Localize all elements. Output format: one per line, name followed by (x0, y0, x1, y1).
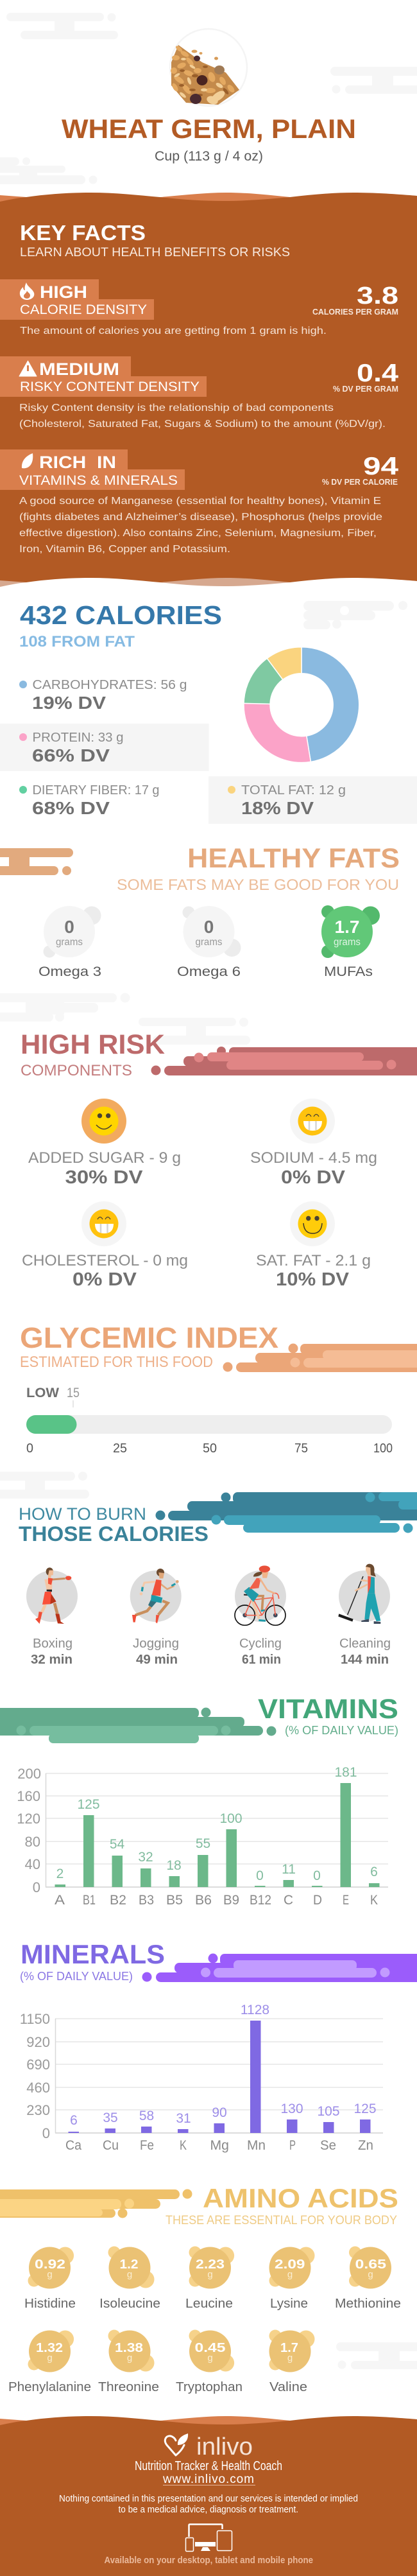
panel: vitamins (0, 1694, 398, 1908)
fact: rich in vitamins and minerals: Iron, Vitamin B6, Copper and Potassium. (19, 544, 230, 555)
amino: phenylalanine: 1.32 (36, 2341, 63, 2355)
bar chart: vitamins: B9 (223, 1893, 239, 1908)
title: WHEAT GERM, PLAIN (62, 114, 356, 144)
panel: calories (0, 600, 417, 824)
stat: dietary fiber (19, 783, 159, 818)
disclaimer: Nothing contained in this presentation and our services is intended or implied (59, 2493, 358, 2504)
amino: methionine: g (368, 2269, 373, 2280)
stat: protein (0, 724, 209, 771)
heading: 432 calories: 432 CALORIES (20, 600, 222, 630)
gauge bar (26, 1386, 393, 1456)
amino: phenylalanine: Phenylalanine (8, 2380, 91, 2394)
heading: how to burn those calories: THOSE CALORIES (19, 1522, 208, 1545)
icon: person sweeping (338, 1564, 380, 1624)
amino: lysine (269, 2247, 314, 2311)
amino: histidine (24, 2247, 76, 2311)
stat: dietary fiber: DIETARY FIBER: 17 g (32, 783, 159, 797)
availability note: Available on your desktop, tablet and mobile phone (104, 2555, 313, 2566)
bar chart: vitamins: 181 (334, 1765, 357, 1780)
subheading: key facts: LEARN ABOUT HEALTH BENEFITS OR RISKS (20, 246, 290, 259)
bar chart: minerals: 35 (103, 2110, 118, 2125)
bar chart: vitamins: 18 (166, 1858, 182, 1873)
panel: key facts (0, 193, 417, 594)
bar chart: vitamins: 0 (33, 1879, 40, 1895)
amino: phenylalanine (8, 2331, 91, 2394)
amino: isoleucine (99, 2246, 160, 2311)
bar chart: vitamins: 120 (17, 1811, 40, 1827)
stat: added sugar: 30% DV (65, 1167, 143, 1188)
subheading: 108 from fat: 108 FROM FAT (19, 633, 135, 650)
amino: valine: g (287, 2353, 293, 2363)
disclaimer: to be a medical advice, diagnosis or treatment. (118, 2504, 298, 2515)
bar chart: minerals: 1128 (241, 2003, 269, 2017)
panel: minerals (20, 1939, 417, 2153)
gauge bar: 15 (67, 1386, 80, 1400)
fact: rich in vitamins and minerals: RICH IN (39, 453, 116, 472)
amino: methionine: Methionine (335, 2297, 401, 2311)
logo: inlivo: inlivo (196, 2433, 253, 2460)
subheading: ESTIMATED FOR THIS FOOD (20, 1353, 213, 1371)
stat: carbohydrates: CARBOHYDRATES: 56 g (32, 678, 187, 692)
bar chart: vitamins: 100 (219, 1811, 243, 1826)
stat: dietary fiber: 68% DV (32, 798, 110, 818)
stat: saturated fat: SAT. FAT - 2.1 g (256, 1252, 371, 1269)
amino: histidine: Histidine (24, 2297, 76, 2311)
fact: medium risky content density: 0.4 (357, 360, 398, 387)
fact: rich in vitamins and minerals (0, 449, 398, 555)
bar chart: vitamins: 125 (77, 1797, 100, 1812)
bar chart: minerals: K (180, 2138, 187, 2153)
heading: amino acids: AMINO ACIDS (203, 2183, 398, 2213)
stat: omega 3: 0 (64, 917, 74, 937)
gauge bar: LOW (26, 1386, 59, 1400)
bar chart: vitamins: 6 (370, 1865, 378, 1879)
fact: rich in vitamins and minerals: A good source of Manganese (essential for healthy bones), Vitamin E (19, 496, 381, 507)
bar chart: minerals: 105 (317, 2104, 340, 2119)
bar chart: vitamins: C (284, 1893, 293, 1908)
panel: healthy fats (0, 843, 400, 979)
stat: saturated fat: 10% DV (276, 1269, 350, 1290)
bar chart: vitamins: A (55, 1893, 65, 1908)
bar chart: minerals: Cu (103, 2138, 119, 2153)
website link: www.inlivo.com (162, 2473, 254, 2486)
stat: omega 6: grams (195, 937, 223, 948)
subheading: SOME FATS MAY BE GOOD FOR YOU (117, 876, 399, 894)
amino: threonine: 1.38 (115, 2341, 143, 2355)
heading: high risk: HIGH RISK (21, 1029, 165, 1060)
disclaimer (59, 2493, 358, 2515)
gauge bar: 100 (373, 1441, 393, 1456)
bar chart: vitamins: E (343, 1893, 349, 1908)
bar chart: vitamins: B3 (139, 1893, 154, 1908)
bar chart: vitamins: 55 (196, 1836, 210, 1851)
bar chart: vitamins: 54 (110, 1837, 124, 1852)
fact: medium risky content density (0, 356, 398, 430)
bar chart: minerals: 230 (26, 2102, 50, 2118)
stat: mufas: 1.7 (335, 917, 359, 937)
bar chart: minerals: 125 (353, 2102, 377, 2116)
bar chart: vitamins: 200 (17, 1766, 41, 1782)
bar chart: vitamins: 11 (282, 1862, 296, 1877)
amino: threonine: Threonine (98, 2380, 159, 2394)
amino: valine: 1.7 (280, 2341, 298, 2355)
amino: lysine: g (287, 2269, 293, 2280)
bar chart: minerals: Zn (358, 2138, 373, 2153)
bar chart: minerals: 0 (42, 2125, 50, 2141)
serving size: Cup (113 g / 4 oz) (155, 149, 263, 164)
bar chart: vitamins: 0 (313, 1868, 321, 1883)
bar chart: vitamins: K (370, 1893, 378, 1908)
amino: lysine: Lysine (270, 2297, 308, 2311)
fact: rich in vitamins and minerals: 94 (363, 453, 398, 480)
stat: mufas (321, 905, 380, 979)
icon: runner (132, 1569, 179, 1623)
stat: cholesterol: CHOLESTEROL - 0 mg (22, 1252, 188, 1269)
amino: isoleucine: g (127, 2269, 132, 2280)
stat: omega 6: 0 (204, 917, 214, 937)
activity: boxing: Boxing (33, 1636, 72, 1651)
amino: tryptophan: Tryptophan (176, 2380, 243, 2394)
amino: valine (269, 2329, 314, 2394)
panel: amino acids (0, 2183, 401, 2394)
activity: cycling (235, 1565, 286, 1667)
bar chart: vitamins: 40 (25, 1856, 40, 1872)
icon: leaf (22, 453, 33, 468)
fact: rich in vitamins and minerals: % DV PER CALORIE (322, 478, 398, 487)
stat: omega 6: Omega 6 (177, 964, 241, 979)
stat: added sugar: ADDED SUGAR - 9 g (28, 1149, 181, 1167)
stat: carbohydrates (19, 678, 187, 713)
amino: tryptophan: 0.45 (195, 2341, 226, 2355)
stat: carbohydrates: 19% DV (32, 693, 106, 713)
bar chart: minerals: 690 (26, 2057, 50, 2073)
fact: medium risky content density: RISKY CONTENT DENSITY (20, 379, 200, 394)
fact: high calorie density: CALORIES PER GRAM (312, 308, 398, 317)
activity: boxing (26, 1567, 78, 1667)
bar chart: vitamins: D (313, 1893, 322, 1908)
stat: omega 3: grams (56, 937, 83, 948)
bar chart: vitamins (17, 1765, 388, 1908)
bar chart: minerals: Mg (210, 2138, 229, 2153)
bar chart: vitamins: 160 (17, 1788, 40, 1804)
amino: histidine: g (47, 2269, 53, 2280)
bar chart: minerals: 130 (280, 2102, 303, 2116)
fact: rich in vitamins and minerals: effective digestion). Also contains Zinc, Selenium, Magnesium, Fiber, (19, 528, 377, 539)
bar chart: minerals: Se (320, 2138, 336, 2153)
heading: key facts: KEY FACTS (20, 221, 146, 245)
activity: cleaning (338, 1564, 391, 1667)
stat: protein: PROTEIN: 33 g (32, 731, 123, 745)
activity: cycling: 61 min (242, 1653, 281, 1667)
subheading: THESE ARE ESSENTIAL FOR YOUR BODY (166, 2213, 397, 2227)
bar chart: vitamins: 2 (56, 1867, 64, 1881)
stat: mufas: MUFAs (324, 964, 373, 979)
fact: high calorie density (0, 279, 398, 336)
amino: threonine (98, 2329, 159, 2394)
amino: phenylalanine: g (47, 2353, 53, 2363)
bar chart: minerals: 460 (26, 2080, 50, 2096)
amino: isoleucine: 1.2 (119, 2258, 139, 2272)
stat: added sugar (28, 1099, 181, 1188)
stat: omega 3: Omega 3 (38, 964, 101, 979)
panel: glycemic index (20, 1321, 417, 1456)
logo: inlivo (165, 2433, 253, 2460)
fact: high calorie density: CALORIE DENSITY (20, 302, 147, 317)
fact: rich in vitamins and minerals: VITAMINS & MINERALS (19, 473, 178, 488)
bar chart: minerals: 31 (176, 2111, 191, 2126)
activity: cleaning: 144 min (341, 1653, 389, 1667)
heading: how to burn those calories: HOW TO BURN (19, 1504, 146, 1524)
fact: medium risky content density: (Cholesterol, Saturated Fat, Sugars & Sodium) to the amount (%DV/gr). (19, 419, 386, 430)
stat: protein: 66% DV (32, 745, 110, 765)
fact: high calorie density: 3.8 (357, 283, 398, 309)
panel: high risk components (21, 1029, 417, 1290)
subheading: (% OF DAILY VALUE) (20, 1970, 133, 1983)
heading: vitamins: VITAMINS (258, 1694, 398, 1725)
bar chart: vitamins: 0 (256, 1868, 264, 1883)
amino: threonine: g (127, 2353, 132, 2363)
activity: cleaning: Cleaning (339, 1636, 391, 1651)
activity: jogging: 49 min (136, 1653, 178, 1667)
bar chart: vitamins: B2 (110, 1893, 126, 1908)
bar chart: vitamins: B5 (166, 1893, 183, 1908)
stat: total fat: TOTAL FAT: 12 g (241, 783, 346, 797)
amino: leucine (185, 2246, 234, 2311)
heading: glycemic index: GLYCEMIC INDEX (20, 1321, 278, 1354)
stat: sodium: SODIUM - 4.5 mg (250, 1149, 377, 1167)
gauge bar: 0 (26, 1441, 33, 1456)
stat: omega 6 (177, 906, 241, 979)
stat: omega 3 (38, 906, 101, 979)
icon: boxer (35, 1567, 71, 1624)
panel: footer (0, 2416, 417, 2576)
stat: total fat: 18% DV (241, 798, 314, 818)
amino: histidine: 0.92 (35, 2258, 65, 2272)
amino: isoleucine: Isoleucine (99, 2297, 160, 2311)
food photo: granola in circle (170, 29, 247, 106)
activity: jogging: Jogging (133, 1636, 179, 1651)
stat: total fat (208, 776, 417, 824)
fact: high calorie density: The amount of calories you are getting from 1 gram is high. (20, 326, 327, 336)
bar chart: minerals (20, 2003, 383, 2153)
bar chart: minerals: Fe (140, 2138, 154, 2153)
bar chart: minerals: 90 (212, 2105, 227, 2120)
heading: how to burn those calories (19, 1504, 208, 1545)
icon: devices (186, 2525, 232, 2552)
icon: flame (20, 283, 34, 300)
bar chart: minerals: Mn (247, 2138, 266, 2153)
fact: medium risky content density: Risky Content density is the relationship of bad components (19, 403, 334, 413)
icon: cyclist (235, 1565, 285, 1625)
bar chart: minerals: Ca (65, 2138, 81, 2153)
activity: boxing: 32 min (31, 1653, 72, 1667)
heading: minerals: MINERALS (21, 1939, 165, 1969)
bar chart: vitamins: B1 (83, 1893, 96, 1908)
amino: methionine (335, 2246, 401, 2311)
panel: how to burn those calories (19, 1492, 417, 1667)
fact: medium risky content density: MEDIUM (39, 360, 119, 379)
gauge bar: 50 (203, 1441, 217, 1456)
amino: methionine: 0.65 (355, 2258, 386, 2272)
bar chart: minerals: P (289, 2138, 296, 2153)
fact: rich in vitamins and minerals: (fights diabetes and Alzheimer’s disease), Phosphorus (helps provide (19, 512, 382, 523)
bar chart: vitamins: 32 (138, 1850, 153, 1865)
stat: saturated fat (256, 1201, 371, 1290)
amino: tryptophan: g (207, 2353, 213, 2363)
amino: leucine: 2.23 (196, 2258, 225, 2272)
bar chart: minerals: 6 (70, 2113, 78, 2128)
stat: cholesterol (22, 1201, 188, 1290)
subheading: components: COMPONENTS (21, 1062, 132, 1079)
donut chart (244, 647, 359, 763)
fact: high calorie density: HIGH (40, 283, 87, 302)
activity: jogging (130, 1569, 182, 1667)
bar chart: minerals: 1150 (20, 2011, 50, 2027)
amino: lysine: 2.09 (275, 2258, 305, 2272)
amino: tryptophan (176, 2329, 243, 2394)
subheading: (% OF DAILY VALUE) (285, 1724, 398, 1737)
gauge bar: 75 (294, 1441, 308, 1456)
bar chart: vitamins: B12 (250, 1893, 271, 1908)
bar chart: minerals: 58 (139, 2109, 154, 2123)
bar chart: vitamins: 80 (25, 1834, 40, 1850)
activity: cycling: Cycling (239, 1636, 282, 1651)
fact: medium risky content density: % DV PER GRAM (333, 385, 398, 394)
stat: cholesterol: 0% DV (72, 1269, 137, 1290)
tagline: Nutrition Tracker & Health Coach (135, 2459, 282, 2473)
amino: leucine: g (207, 2269, 213, 2280)
icon: warning triangle (19, 361, 37, 376)
amino: leucine: Leucine (185, 2297, 233, 2311)
stat: sodium: 0% DV (281, 1167, 346, 1188)
gauge bar: 25 (113, 1441, 127, 1456)
bar chart: vitamins: B6 (195, 1893, 212, 1908)
bar chart: minerals: 920 (26, 2034, 50, 2050)
stat: sodium (250, 1099, 377, 1188)
heading: healthy fats: HEALTHY FATS (187, 843, 400, 874)
amino: valine: Valine (269, 2380, 307, 2394)
stat: mufas: grams (334, 937, 361, 948)
